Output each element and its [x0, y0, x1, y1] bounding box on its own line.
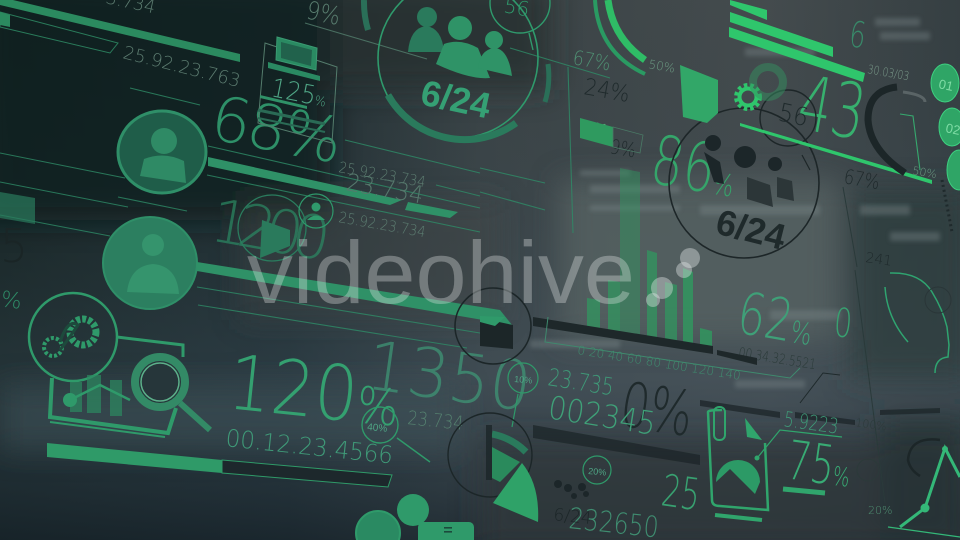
small numbers: 67% — [571, 45, 613, 76]
small numbers: 241 — [864, 250, 893, 270]
big numbers: 1350 — [362, 327, 536, 428]
small numbers: 002345 — [546, 388, 658, 443]
icon: team ring 6/24 green: 6/24 — [417, 72, 494, 126]
small numbers: 00.12.23.4566 — [224, 424, 394, 470]
big numbers: 1200 — [205, 186, 336, 276]
icon: dark team ring 6/24: 56 — [776, 98, 811, 132]
icon: green box left edge — [0, 192, 35, 224]
small numbers: 5.9223 — [782, 407, 840, 439]
big numbers: 25 — [658, 465, 703, 521]
icon: 20% circle and small team — [554, 456, 611, 499]
icon: head profile outline — [843, 180, 952, 503]
big numbers: 86% — [645, 121, 742, 214]
big numbers: 5 — [0, 219, 28, 273]
icon: magnifier 40% — [362, 407, 430, 462]
icon: dark briefcase ring and dark bar — [455, 288, 840, 403]
icon: dark team ring 6/24: 6/24 — [712, 201, 790, 258]
small numbers: 25.92.23.734 — [337, 208, 427, 241]
icon: gear — [736, 67, 783, 109]
big numbers: 6 — [847, 14, 868, 57]
small numbers: 23.735 — [546, 363, 616, 401]
small numbers: 6/24 — [552, 505, 593, 529]
progress bars — [0, 0, 512, 487]
icon: line chart bottom right — [888, 439, 960, 537]
big numbers: 0 — [832, 300, 854, 348]
icon: monitor with cursor, 125% — [258, 37, 337, 143]
icon: 20% circle and small team: 20% — [588, 466, 607, 478]
big numbers: 75% — [783, 428, 855, 500]
small numbers: 23.734 — [406, 407, 464, 435]
icon: magnifier 10% — [508, 363, 538, 427]
small numbers: 100% — [855, 416, 888, 433]
big numbers: 120% — [224, 337, 404, 444]
icon: magnifier 40%: 40% — [367, 422, 388, 435]
guide lines — [0, 23, 610, 348]
small numbers: 50% — [647, 57, 676, 76]
small numbers: 23.734 — [344, 168, 426, 209]
icon: small team circle and triangle — [238, 194, 333, 261]
icon: dark team ring 6/24 — [669, 90, 819, 258]
panel: distant bar chart — [587, 168, 712, 352]
small numbers: 20% — [868, 504, 892, 517]
big numbers: 68% — [205, 81, 349, 178]
icon: top green arc gauge — [595, 0, 645, 74]
small numbers: 25.92.23.734 — [337, 158, 427, 191]
icon: gears and magnifier chart — [29, 293, 210, 437]
icon: team ring 6/24 green — [364, 0, 549, 140]
icon: dark arc gauge — [868, 87, 925, 173]
icon: pie chart — [448, 413, 538, 522]
icon: green numbered cells right — [931, 64, 960, 190]
icon: bottom group — [356, 494, 474, 540]
small numbers: 50% — [911, 164, 938, 181]
panel: left person rows — [0, 0, 610, 487]
small numbers: 30.03/03 — [866, 62, 910, 83]
small numbers: 9% — [608, 134, 638, 162]
big numbers: 43 — [792, 58, 872, 157]
watermark: videohive — [247, 223, 635, 322]
big numbers: 0% — [616, 368, 698, 451]
icon: device with pie right — [708, 407, 879, 520]
icon: magnifier 10%: 10% — [514, 374, 533, 386]
small numbers: 24% — [582, 74, 632, 108]
small numbers: 00.34.32.5521 — [737, 345, 817, 373]
icon: small ring with 56 at top — [490, 0, 550, 50]
small numbers: 67% — [842, 164, 882, 194]
small numbers: 25.92.23.763 — [121, 42, 242, 92]
small numbers: 0 20 40 60 80 100 120 140 — [577, 343, 742, 383]
small numbers: 241 — [582, 119, 609, 138]
big numbers: 62% — [733, 279, 819, 359]
icon: monitor with cursor, 125%: 125% — [269, 73, 329, 114]
icon: top-right bars — [580, 0, 932, 184]
icon: green numbered cells right: 01 — [937, 76, 955, 94]
icon: person avatar lower — [103, 217, 197, 309]
icon: person avatar top — [118, 111, 206, 193]
